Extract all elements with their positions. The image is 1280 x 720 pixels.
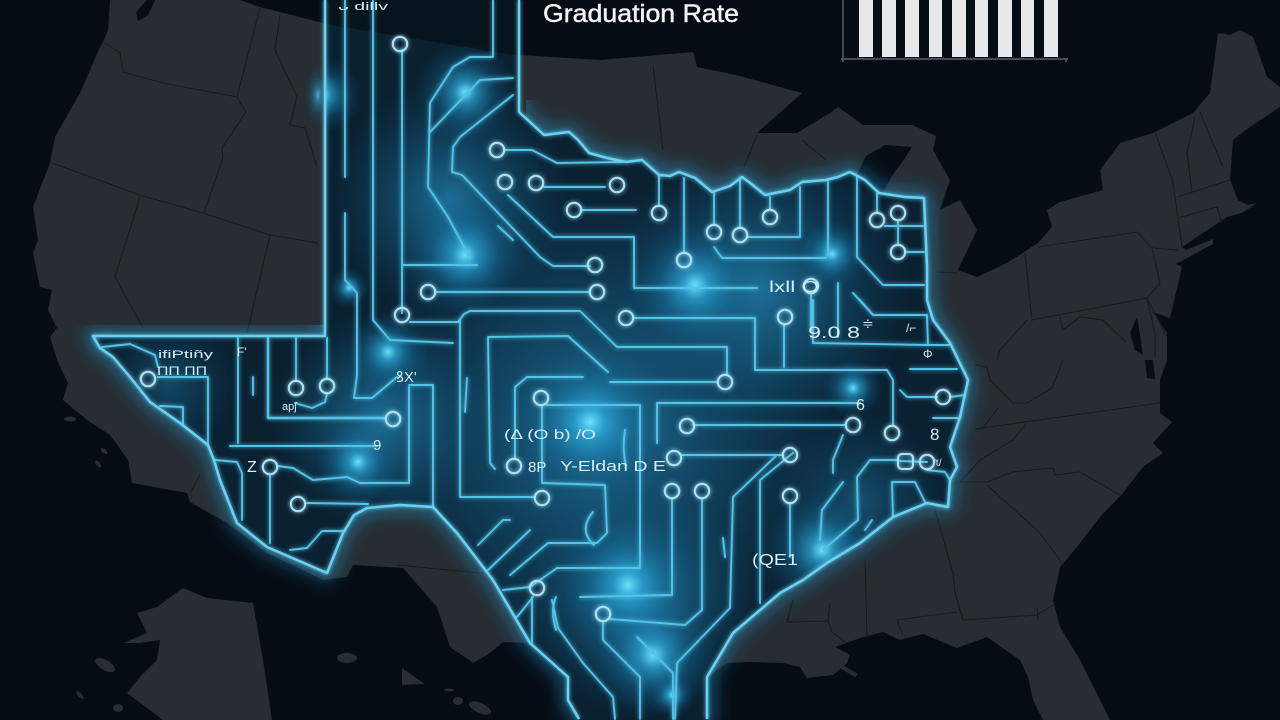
puget sound	[136, 0, 155, 21]
garbled circuit labels: 6	[856, 397, 865, 414]
garbled circuit labels: (Δ (O b) /O	[504, 426, 596, 442]
title: Graduation Rate: Graduation Rate	[543, 1, 739, 28]
square circuit node	[898, 454, 913, 469]
garbled circuit labels: ᴗ dillv	[338, 1, 389, 13]
garbled circuit labels: ꝸX'	[396, 369, 417, 386]
Texas fill	[93, 0, 968, 720]
garbled circuit labels: (QE1	[752, 552, 798, 569]
garbled circuit labels: ≑	[862, 315, 874, 331]
pamlico sound	[1145, 360, 1155, 379]
garbled circuit labels: Z	[247, 459, 257, 476]
chart bars	[859, 0, 1058, 57]
circuit node circles	[148, 44, 943, 614]
garbled circuit labels: F'	[237, 345, 247, 359]
chesapeake bay	[1130, 317, 1143, 355]
circuit board traces	[102, 0, 965, 719]
Texas state outline	[93, 0, 968, 719]
outer glow of Texas	[77, 100, 984, 720]
garbled circuit labels: 8P	[528, 459, 546, 476]
garbled circuit labels	[157, 1, 942, 569]
garbled circuit labels: 9	[373, 437, 381, 454]
garbled circuit labels: /⌐	[906, 321, 916, 335]
bar chart	[841, 0, 1068, 62]
chart axes	[841, 0, 1068, 62]
garbled circuit labels: apʃ	[282, 401, 298, 413]
alaska and island landmasses	[64, 416, 858, 720]
glow spots inside Texas	[100, 0, 950, 718]
garbled circuit labels: ifiPtiñy	[158, 349, 214, 361]
garbled circuit labels: Φ	[923, 347, 933, 361]
glow on panhandle edge	[304, 63, 332, 127]
garbled circuit labels: 't/	[934, 458, 942, 469]
lake michigan	[855, 145, 912, 198]
garbled circuit labels: 8	[930, 425, 939, 444]
garbled circuit labels: Y-Eldan D E	[560, 458, 666, 475]
garbled circuit labels: 9.0 8	[808, 323, 860, 342]
garbled circuit labels: lxll O	[769, 279, 819, 296]
garbled circuit labels: ΠΠ ΠΠ	[157, 364, 207, 378]
